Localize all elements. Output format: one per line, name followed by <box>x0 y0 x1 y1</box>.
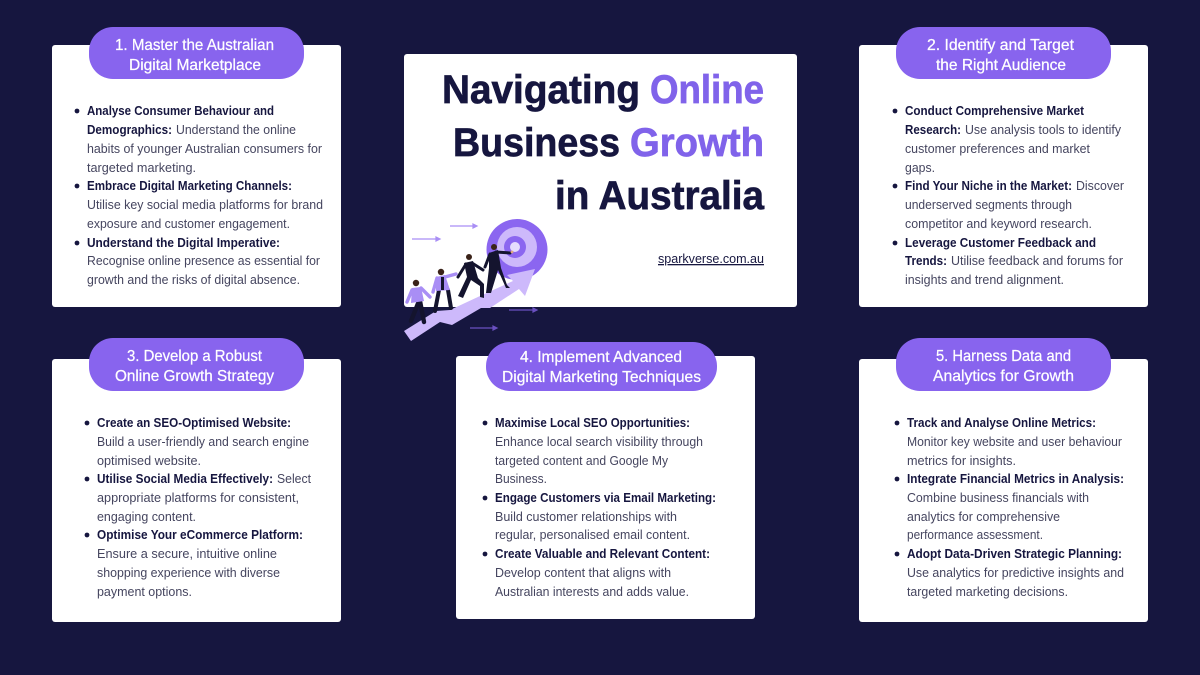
panel 1 list: Understand the online <box>176 123 296 137</box>
panel 5 list <box>895 416 1124 599</box>
panel 3 list: appropriate platforms for consistent, <box>97 491 299 505</box>
panel 3 list: Utilise Social Media Effectively: <box>97 472 273 486</box>
panel 3 list: optimised website. <box>97 454 201 468</box>
panel 1 list: Utilise key social media platforms for brand <box>87 198 323 212</box>
title: Online <box>650 68 764 112</box>
panel 2 heading <box>896 27 1111 79</box>
person 2 <box>433 269 456 311</box>
panel 1 heading: Digital Marketplace <box>129 57 261 74</box>
panel 5 list: metrics for insights. <box>907 454 1016 468</box>
panel 1 list: targeted marketing. <box>87 161 196 175</box>
panel 2 list: customer preferences and market <box>905 142 1091 156</box>
title <box>442 68 765 218</box>
panel 2 heading: the Right Audience <box>936 57 1066 74</box>
panel 3 list: Build a user-friendly and search engine <box>97 435 309 449</box>
panel 2 list: Use analysis tools to identify <box>965 123 1122 137</box>
panel 4 list <box>483 416 716 599</box>
title: Business <box>453 121 620 165</box>
panel 5 list: Adopt Data-Driven Strategic Planning: <box>907 547 1122 561</box>
panel 4 list: Create Valuable and Relevant Content: <box>495 547 710 561</box>
panel 3 list: engaging content. <box>97 510 196 524</box>
panel 5 heading <box>896 338 1111 391</box>
panel 4 list: Business. <box>495 472 547 486</box>
panel 2 list: Discover <box>1076 179 1124 193</box>
panel 1 <box>52 27 341 307</box>
panel 4 list: Enhance local search visibility through <box>495 435 703 449</box>
panel 2 list: Conduct Comprehensive Market <box>905 104 1085 118</box>
panel 4 heading: 4. Implement Advanced <box>520 349 682 366</box>
person 3 <box>458 254 484 298</box>
panel 1 heading <box>89 27 304 79</box>
panel 2 list: Find Your Niche in the Market: <box>905 179 1072 193</box>
icon: target <box>486 219 548 280</box>
panel 5 heading: Analytics for Growth <box>933 368 1074 385</box>
panel 1 heading: 1. Master the Australian <box>115 37 274 54</box>
title: Navigating <box>442 68 640 112</box>
panel 5 list: Combine business financials with <box>907 491 1089 505</box>
panel 5 list: targeted marketing decisions. <box>907 585 1068 599</box>
panel 1 list: Understand the Digital Imperative: <box>87 236 280 250</box>
panel 1 list: exposure and customer engagement. <box>87 217 290 231</box>
panel 3 heading <box>89 338 304 391</box>
panel 2 list: Leverage Customer Feedback and <box>905 236 1096 250</box>
title: in Australia <box>555 174 765 218</box>
panel 3 <box>52 338 341 622</box>
panel 3 list: payment options. <box>97 585 192 599</box>
panel: title card <box>404 54 797 307</box>
panel 2 list: Utilise feedback and forums for <box>951 254 1123 268</box>
small motion arrows <box>412 224 537 330</box>
panel 3 heading: Online Growth Strategy <box>115 368 274 385</box>
panel 5 list: performance assessment. <box>907 528 1043 542</box>
person 4 <box>485 244 513 293</box>
panel 1 list <box>75 104 323 287</box>
panel 1 list: Embrace Digital Marketing Channels: <box>87 179 292 193</box>
panel 4 list: Australian interests and adds value. <box>495 585 689 599</box>
panel 2 list: underserved segments through <box>905 198 1072 212</box>
website link: sparkverse.com.au <box>658 251 764 266</box>
panel 2 list: Research: <box>905 123 961 137</box>
panel 3 list: Select <box>277 472 312 486</box>
panel 2 list: insights and trend alignment. <box>905 273 1064 287</box>
panel 1 list: growth and the risks of digital absence. <box>87 273 300 287</box>
arrow: growth <box>404 269 535 341</box>
panel 5 list: Use analytics for predictive insights and <box>907 566 1124 580</box>
panel 3 list: Create an SEO-Optimised Website: <box>97 416 291 430</box>
panel 1 list: Analyse Consumer Behaviour and <box>87 104 274 118</box>
panel 5 heading: 5. Harness Data and <box>936 348 1071 365</box>
panel 4 list: Develop content that aligns with <box>495 566 671 580</box>
panel 5 list: analytics for comprehensive <box>907 510 1060 524</box>
panel 4 <box>456 342 755 619</box>
illustration: team climbing an arrow toward a target <box>404 219 548 341</box>
panel 5 <box>859 338 1148 622</box>
panel 2 list: Trends: <box>905 254 947 268</box>
title: Growth <box>630 121 764 165</box>
panel 2 list: competitor and keyword research. <box>905 217 1092 231</box>
panel 4 list: Engage Customers via Email Marketing: <box>495 491 716 505</box>
panel 4 heading: Digital Marketing Techniques <box>502 369 701 386</box>
panel 4 list: regular, personalised email content. <box>495 528 690 542</box>
panel 2 list <box>893 104 1124 287</box>
panel 3 list: Ensure a secure, intuitive online <box>97 547 277 561</box>
panel 4 heading <box>486 342 717 391</box>
panel 4 list: Build customer relationships with <box>495 510 677 524</box>
panel 1 list: Demographics: <box>87 123 172 137</box>
panel 3 list: Optimise Your eCommerce Platform: <box>97 528 303 542</box>
panel 1 list: habits of younger Australian consumers for <box>87 142 322 156</box>
panel 3 list: shopping experience with diverse <box>97 566 280 580</box>
panel 5 list: Monitor key website and user behaviour <box>907 435 1122 449</box>
panel 5 list: Track and Analyse Online Metrics: <box>907 416 1096 430</box>
panel 2 <box>859 27 1148 307</box>
panel 2 list: gaps. <box>905 161 935 175</box>
panel 5 list: Integrate Financial Metrics in Analysis: <box>907 472 1124 486</box>
panel 3 list <box>85 416 312 599</box>
panel 1 list: Recognise online presence as essential for <box>87 254 320 268</box>
panel 4 list: targeted content and Google My <box>495 454 669 468</box>
panel 4 list: Maximise Local SEO Opportunities: <box>495 416 690 430</box>
person 1 <box>407 280 430 322</box>
panel 3 heading: 3. Develop a Robust <box>127 348 263 365</box>
panel 2 heading: 2. Identify and Target <box>927 37 1075 54</box>
